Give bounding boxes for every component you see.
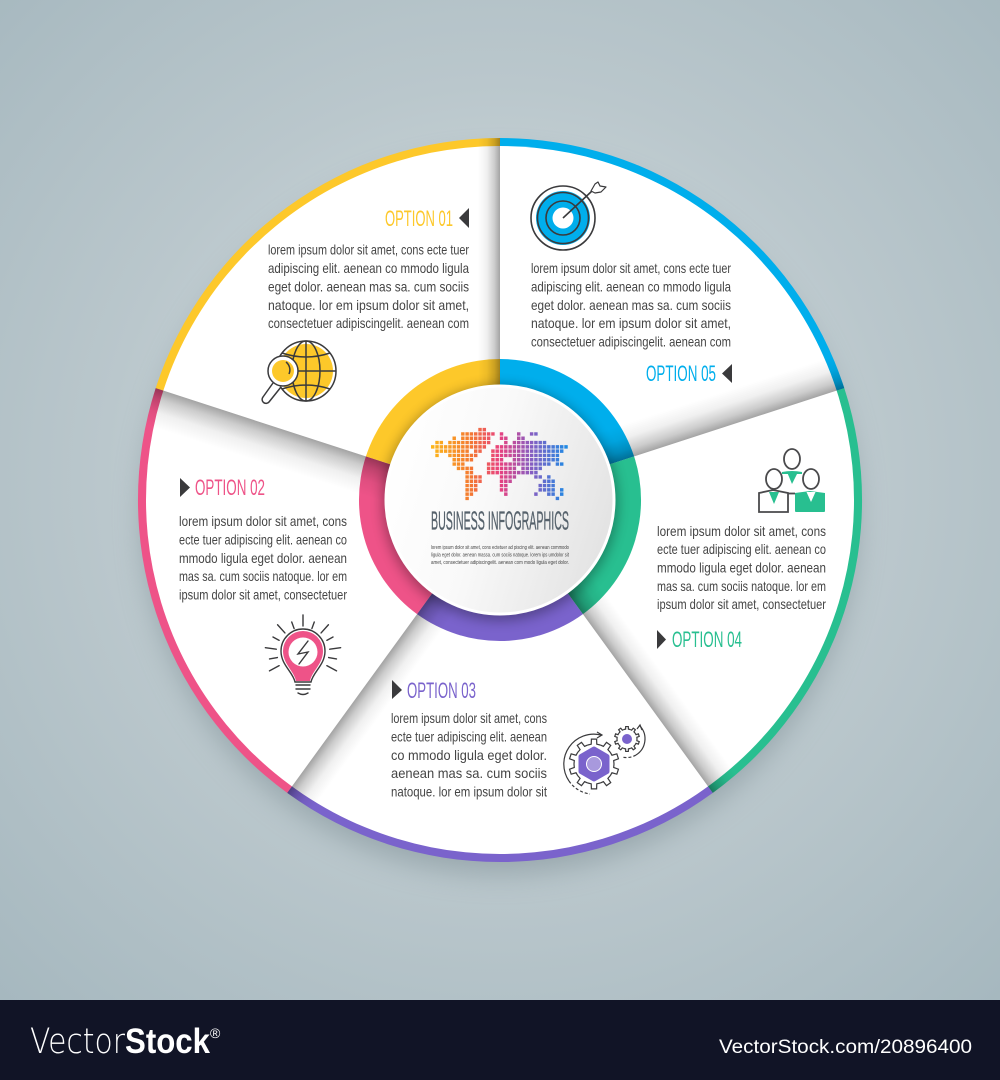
text: option 02 <box>179 513 347 602</box>
text: option 03 <box>391 710 547 800</box>
text: option 05: adipiscing elit. aenean co mmodo ligula <box>531 278 731 294</box>
circle drop shadow <box>142 158 858 874</box>
text: option 01 <box>268 242 469 331</box>
text: option 01: consectetuer adipiscingelit. aenean com <box>268 315 469 331</box>
text: option 03: aenean mas sa. cum sociis <box>391 765 547 781</box>
text: option 05: eget dolor. aenean mas sa. cum sociis <box>531 297 731 313</box>
panel: option 02 <box>179 475 347 694</box>
centre disc shadow <box>382 385 618 621</box>
text: option 01: adipiscing elit. aenean co mmodo ligula <box>268 260 469 276</box>
seam shadows <box>136 130 852 817</box>
centre caption <box>431 545 569 566</box>
text: option 04: ipsum dolor sit amet, consectetuer <box>657 596 826 612</box>
icon: people <box>759 449 825 512</box>
centre caption: ligula eget dolor. aenean massa. cum sociis natoque. lorem ips umdolor sit <box>431 552 569 558</box>
footer bar <box>0 1000 1000 1080</box>
heading: option 04: OPTION 04 <box>672 627 742 652</box>
text: option 05: consectetuer adipiscingelit. aenean com <box>531 334 731 350</box>
centre caption: amet, consectetuer adipiscingelit. aenean com modo ligula eget dolor. <box>431 560 569 566</box>
text: option 05: lorem ipsum dolor sit amet, cons ecte tuer <box>531 260 731 276</box>
heading: option 03: OPTION 03 <box>407 678 476 703</box>
text: option 04: mmodo ligula eget dolor. aenean <box>657 560 826 576</box>
text: option 02: ecte tuer adipiscing elit. aenean co <box>179 532 347 548</box>
text: option 02: lorem ipsum dolor sit amet, cons <box>179 513 347 529</box>
heading: option 02: OPTION 02 <box>195 475 265 500</box>
footer id: VectorStock.com/20896400 <box>719 1036 972 1058</box>
footer logo: Stock <box>125 1022 210 1061</box>
text: option 04 <box>657 523 826 612</box>
centre caption: lorem ipsum dolor sit amet, cons ectetuer ad piscing elit. aenean commodo <box>431 545 569 551</box>
text: option 05 <box>531 260 731 350</box>
arrow: option 01 <box>459 208 469 228</box>
footer logo: Vector <box>30 1022 126 1062</box>
text: option 02: mas sa. cum sociis natoque. lor em <box>179 568 347 584</box>
text: option 05: natoque. lor em ipsum dolor sit amet, <box>531 315 731 331</box>
arrow: option 04 <box>657 630 666 649</box>
text: option 01: natoque. lor em ipsum dolor sit amet, <box>268 297 469 313</box>
inner colour ring <box>359 359 641 641</box>
footer logo <box>30 1022 221 1062</box>
text: option 02: mmodo ligula eget dolor. aenean <box>179 550 347 566</box>
text: option 04: lorem ipsum dolor sit amet, cons <box>657 523 826 539</box>
text: option 03: ecte tuer adipiscing elit. aenean <box>391 728 547 744</box>
heading: option 05: OPTION 05 <box>646 361 716 386</box>
text: option 01: eget dolor. aenean mas sa. cum sociis <box>268 278 469 294</box>
arrow: option 02 <box>180 478 190 497</box>
text: option 03: lorem ipsum dolor sit amet, cons <box>391 710 547 726</box>
text: option 04: mas sa. cum sociis natoque. lor em <box>657 578 826 594</box>
panel: wheel base <box>138 138 862 862</box>
panel: option 04 <box>657 449 826 652</box>
arrow: option 05 <box>722 364 732 383</box>
text: option 03: natoque. lor em ipsum dolor sit <box>391 784 547 800</box>
panel: option 05 <box>531 182 732 386</box>
panel: option 03 <box>391 678 645 800</box>
panel: option 01 <box>262 206 469 403</box>
heading: option 01: OPTION 01 <box>385 206 453 231</box>
text: option 03: co mmodo ligula eget dolor. <box>391 747 547 763</box>
text: option 02: ipsum dolor sit amet, consectetuer <box>179 586 347 602</box>
world map dotted <box>431 430 569 498</box>
arrow: option 03 <box>392 680 402 699</box>
text: BUSINESS INFOGRAPHICS <box>431 508 569 536</box>
footer logo: ® <box>210 1025 221 1041</box>
centre disc <box>386 386 614 614</box>
icon: light bulb <box>265 615 341 694</box>
icon: gears <box>564 725 645 794</box>
icon: target <box>531 182 606 250</box>
icon: globe with magnifier <box>262 341 336 403</box>
text: option 04: ecte tuer adipiscing elit. aenean co <box>657 541 826 557</box>
text: option 01: lorem ipsum dolor sit amet, cons ecte tuer <box>268 242 469 258</box>
